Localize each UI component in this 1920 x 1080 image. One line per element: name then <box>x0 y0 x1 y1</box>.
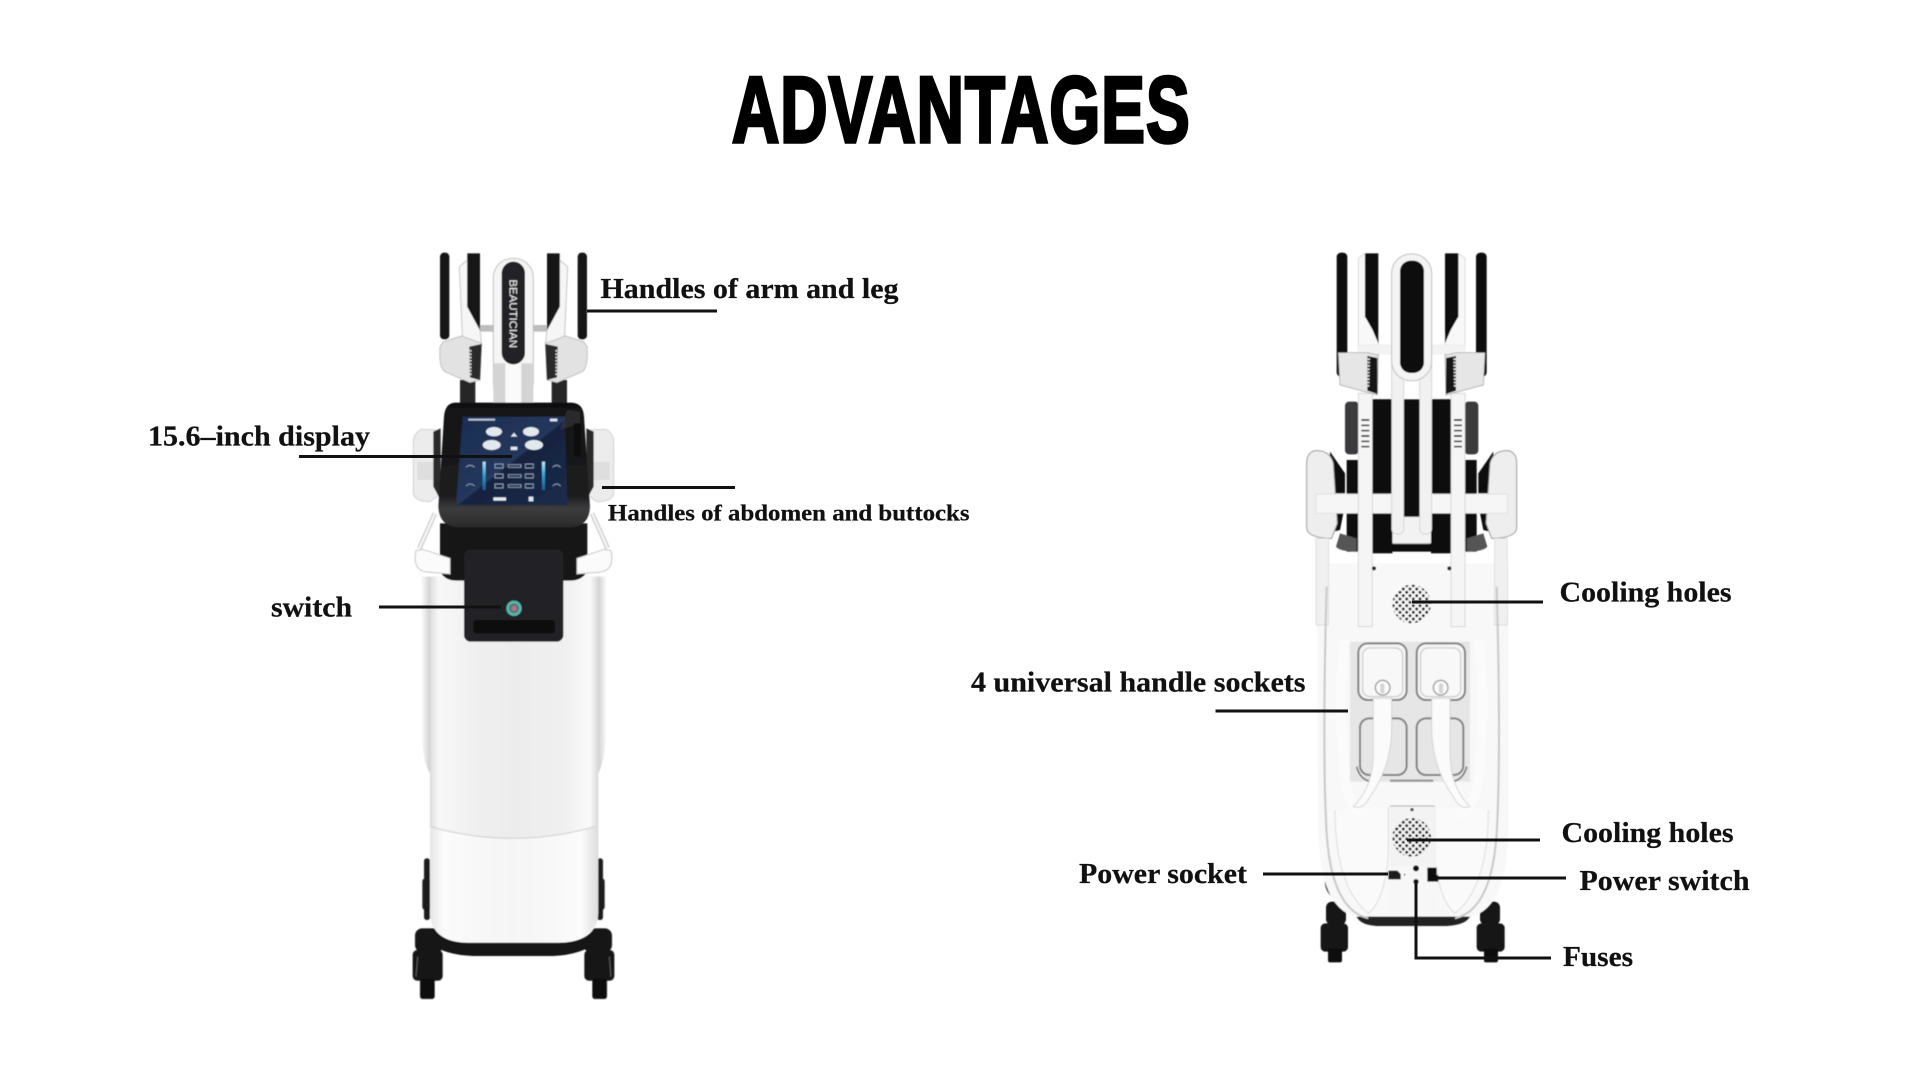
speaker: upper cooling holes <box>1392 585 1431 623</box>
leader line: lower cooling holes <box>1407 838 1540 842</box>
label: Handles of abdomen and buttocks: Handles of abdomen and buttocks <box>608 500 970 526</box>
label: 4 universal handle sockets: 4 universal handle sockets <box>971 668 1306 698</box>
label: switch: switch <box>271 592 352 624</box>
touch screen <box>456 410 581 505</box>
screw holes <box>1372 566 1451 570</box>
label: Cooling holes upper: Cooling holes <box>1560 578 1732 608</box>
rear base and wheels <box>1321 872 1505 962</box>
center arch and label pill: BEAUTICIAN <box>506 279 518 348</box>
rear ports <box>1388 865 1438 884</box>
arm and leg handles <box>413 253 614 574</box>
display housing <box>438 403 590 527</box>
icon: power switch <box>508 602 520 615</box>
leader line: fuses <box>1416 882 1551 958</box>
rear black core <box>1347 399 1477 552</box>
label: Handles of arm and leg: Handles of arm and leg <box>600 274 898 305</box>
title: ADVANTAGES <box>732 58 1191 163</box>
speaker: lower cooling holes <box>1392 818 1431 857</box>
leader line: display <box>299 455 512 458</box>
socket panel <box>1324 587 1499 918</box>
leader line: abdomen handles <box>602 486 735 489</box>
leader line: upper cooling holes <box>1412 600 1543 604</box>
leader line: switch <box>379 606 501 608</box>
rear handles and tubes <box>1307 253 1517 627</box>
leader line: power switch <box>1437 876 1566 880</box>
cabinet body <box>422 577 606 943</box>
leader line: handle sockets <box>1216 710 1348 712</box>
central white U bracket <box>1383 400 1440 543</box>
machine: rear view <box>1307 253 1517 962</box>
center arch and label pill <box>493 258 533 403</box>
rear center arch <box>1392 254 1432 381</box>
label: Power socket: Power socket <box>1079 859 1248 890</box>
lower housing <box>440 523 587 581</box>
wheels and base <box>413 858 614 999</box>
label: Fuses: Fuses <box>1563 942 1633 973</box>
leader line: arm and leg <box>587 310 717 312</box>
rear cabinet <box>1317 563 1508 917</box>
label: Cooling holes lower: Cooling holes <box>1562 818 1734 849</box>
machine: front view <box>413 253 614 999</box>
switch panel <box>464 549 563 642</box>
leader line: power socket <box>1263 872 1388 876</box>
label: Power switch: Power switch <box>1580 866 1750 897</box>
label: 15.6-inch display: 15.6–inch display <box>148 422 370 452</box>
